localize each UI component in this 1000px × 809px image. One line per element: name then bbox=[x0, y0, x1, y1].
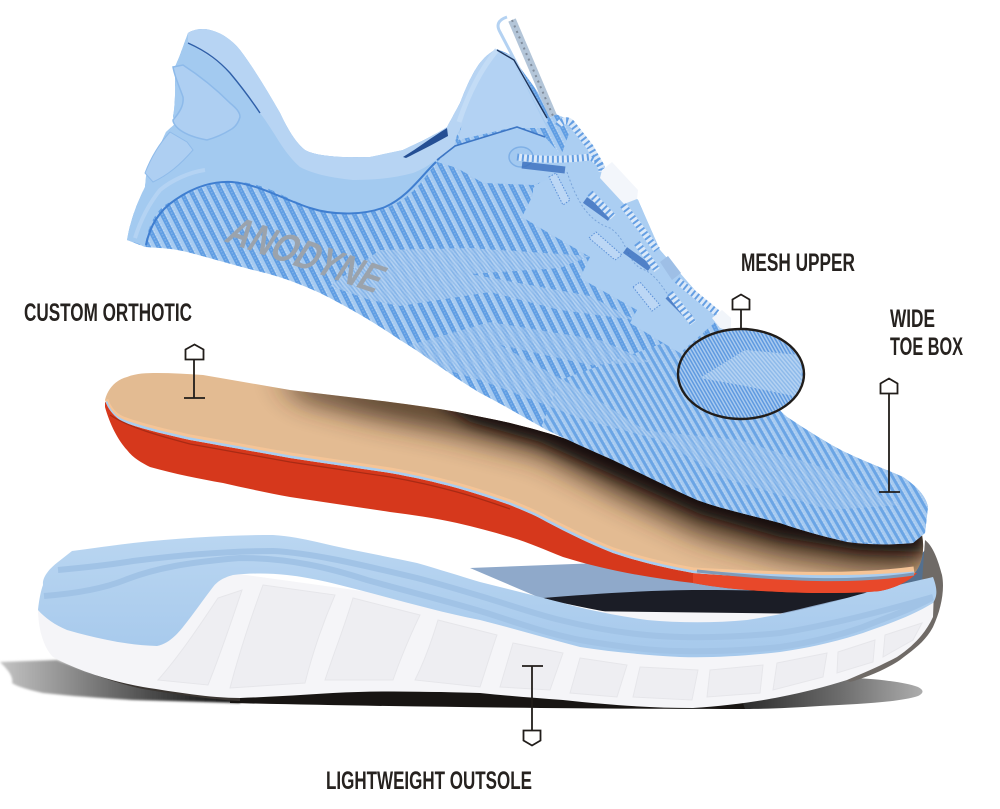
laces bbox=[517, 121, 717, 323]
shadow right bbox=[740, 678, 922, 709]
insole surface bbox=[105, 373, 923, 579]
eyelet panel bbox=[437, 127, 570, 185]
shadow centre bbox=[230, 690, 760, 709]
lacing panel bbox=[522, 125, 720, 353]
insole toe grey edge bbox=[697, 571, 914, 580]
outsole marker bbox=[522, 666, 543, 746]
toe region finer knit bbox=[540, 330, 940, 550]
wide toe box marker bbox=[879, 378, 900, 492]
mesh upper marker bbox=[732, 294, 750, 329]
eyelet panel seam bbox=[437, 127, 545, 160]
custom orthotic label: CUSTOM ORTHOTIC bbox=[24, 299, 192, 327]
wide toe box label: WIDE bbox=[890, 305, 935, 333]
heel rim highlight bbox=[135, 170, 205, 238]
blue foam layers bbox=[38, 535, 936, 657]
magnifier fill bbox=[678, 329, 804, 419]
mesh upper label: MESH UPPER bbox=[741, 249, 855, 277]
upper base mesh bbox=[127, 29, 928, 544]
insole edge peach bbox=[105, 400, 914, 575]
eyelet bbox=[509, 147, 533, 167]
collar seam bbox=[188, 43, 260, 113]
sole panels bbox=[158, 585, 922, 700]
heel lower pad bbox=[145, 132, 193, 182]
tongue edge fuzz bbox=[459, 50, 497, 122]
insole red base bbox=[105, 402, 917, 593]
outsole / midsole bbox=[38, 535, 943, 708]
callout: lightweight outsole bbox=[326, 666, 543, 795]
lace loop pull tab bbox=[497, 17, 553, 122]
ground shadow bbox=[0, 660, 922, 709]
heel counter blue edge bbox=[146, 162, 436, 245]
stitched rib tabs bbox=[549, 173, 660, 311]
insole toe red highlight bbox=[693, 570, 917, 593]
footbed dark side bbox=[890, 550, 935, 590]
lighter knit chevrons bbox=[330, 248, 900, 510]
insole wide arch shading bbox=[275, 375, 925, 572]
collar lining bbox=[188, 29, 497, 180]
callout: wide toe box: TOE BOX bbox=[890, 333, 963, 361]
insole red crease bbox=[110, 415, 510, 509]
foam layer shading bbox=[58, 551, 933, 637]
lace toggle large bbox=[600, 162, 638, 204]
tongue logo tab bbox=[660, 256, 681, 280]
callout: wide toe box bbox=[879, 305, 963, 492]
brand name: ANODYNE bbox=[218, 209, 395, 301]
outsole label: LIGHTWEIGHT OUTSOLE bbox=[326, 767, 532, 795]
midsole dark interior bbox=[543, 590, 887, 622]
callout: mesh upper magnifier bbox=[678, 249, 855, 419]
lace shadows bbox=[522, 165, 690, 318]
insole deep shadow bbox=[430, 395, 925, 552]
underside tread bbox=[56, 652, 240, 701]
mesh upper shoe bbox=[127, 17, 940, 550]
shadow left bbox=[0, 660, 240, 703]
lace toggle small bbox=[712, 310, 731, 332]
inner collar dark opening bbox=[403, 128, 448, 158]
insole edge blue bbox=[105, 402, 914, 578]
neoprene heel counter bbox=[127, 29, 447, 246]
midsole inner footbed bbox=[470, 555, 930, 628]
toe grey rubber edge bbox=[846, 540, 943, 682]
white sole bbox=[38, 570, 934, 708]
custom orthotic marker bbox=[184, 344, 205, 398]
tongue bbox=[458, 50, 547, 140]
heel tab molding bbox=[173, 65, 240, 140]
custom orthotic insole bbox=[105, 373, 925, 593]
callout: custom orthotic bbox=[24, 299, 205, 398]
panel stitching bbox=[567, 172, 680, 310]
